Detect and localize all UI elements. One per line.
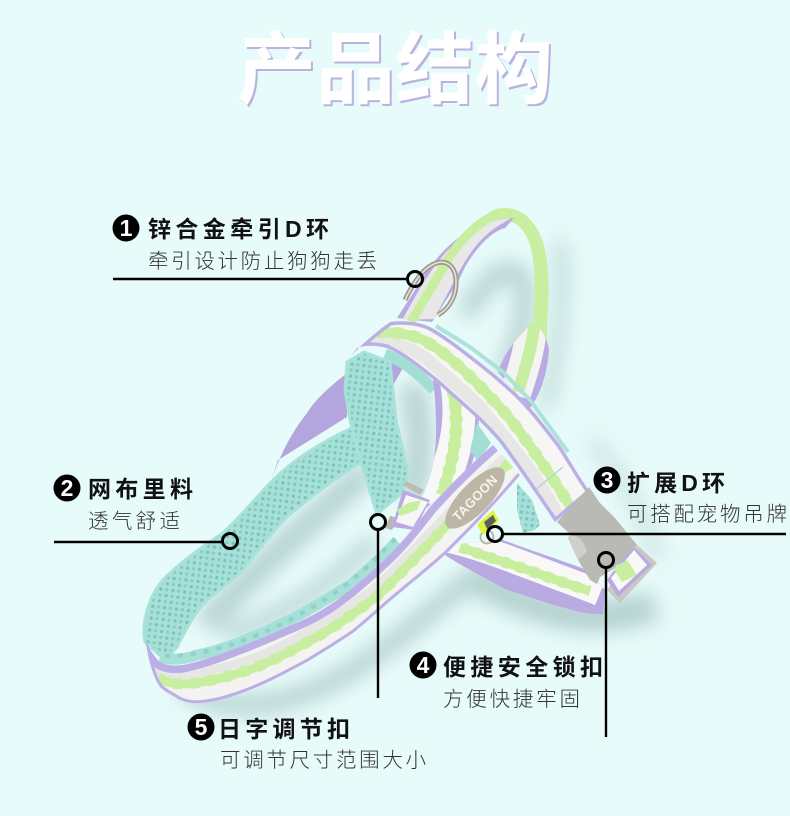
infographic canvas bbox=[54, 208, 786, 769]
D ring bbox=[405, 262, 456, 315]
callout 5: slider bbox=[188, 514, 426, 772]
number badge 1: 1 bbox=[120, 215, 133, 241]
heading 4: 便捷安全锁扣 bbox=[443, 654, 603, 680]
number badge 2: 2 bbox=[61, 475, 73, 501]
heading 2: 网布里料 bbox=[88, 476, 193, 502]
number badge 4 bbox=[410, 652, 436, 678]
harness illustration bbox=[144, 208, 657, 703]
top loop strap bbox=[397, 208, 549, 408]
main webbing band bbox=[145, 445, 520, 703]
leader line 2 bbox=[54, 534, 238, 548]
description 3: 可搭配宠物吊牌 bbox=[627, 503, 787, 526]
heading 5: 日字调节扣 bbox=[218, 716, 350, 742]
number badge 3 bbox=[594, 466, 620, 494]
neon hang tag with D ring bbox=[477, 510, 499, 544]
lavender back panel bbox=[270, 362, 403, 484]
brand tag bbox=[436, 459, 514, 537]
top crossing strap bbox=[350, 321, 590, 522]
drop shadows bbox=[181, 240, 660, 705]
description 1: 牵引设计防止狗狗走丢 bbox=[148, 250, 377, 273]
vertical strap bbox=[422, 380, 491, 508]
leader line 5 bbox=[370, 514, 386, 698]
description 5: 可调节尺寸范围大小 bbox=[220, 749, 426, 772]
mesh edge peeking behind crossing strap bbox=[385, 326, 568, 533]
callout 3: extension D ring bbox=[488, 466, 787, 542]
leader line 3 bbox=[488, 526, 786, 542]
heading 3: 扩展D环 bbox=[627, 470, 725, 496]
title: 产品结构 bbox=[237, 25, 553, 114]
plastic buckle bbox=[557, 487, 657, 603]
mesh lining bbox=[144, 352, 408, 660]
slider buckle strap bbox=[385, 481, 430, 530]
number badge 3: 3 bbox=[601, 467, 613, 493]
lower strap to buckle bbox=[445, 540, 605, 614]
leader line 4 bbox=[598, 552, 614, 737]
number badge 5 bbox=[188, 714, 214, 740]
callout 4: safety buckle bbox=[410, 552, 614, 737]
number badge 4: 4 bbox=[417, 652, 430, 678]
leader line 1 bbox=[113, 272, 422, 286]
description 4: 方便快捷牢固 bbox=[443, 688, 580, 711]
description 2: 透气舒适 bbox=[88, 510, 180, 533]
heading 1: 锌合金牵引D环 bbox=[148, 216, 329, 242]
callout 1: alloy D ring bbox=[112, 214, 422, 286]
callout 2: mesh lining bbox=[54, 474, 238, 548]
number badge 2 bbox=[54, 474, 80, 502]
number badge 5: 5 bbox=[195, 714, 208, 740]
number badge 1 bbox=[112, 214, 140, 242]
brand tag: TAGOON bbox=[449, 472, 501, 524]
